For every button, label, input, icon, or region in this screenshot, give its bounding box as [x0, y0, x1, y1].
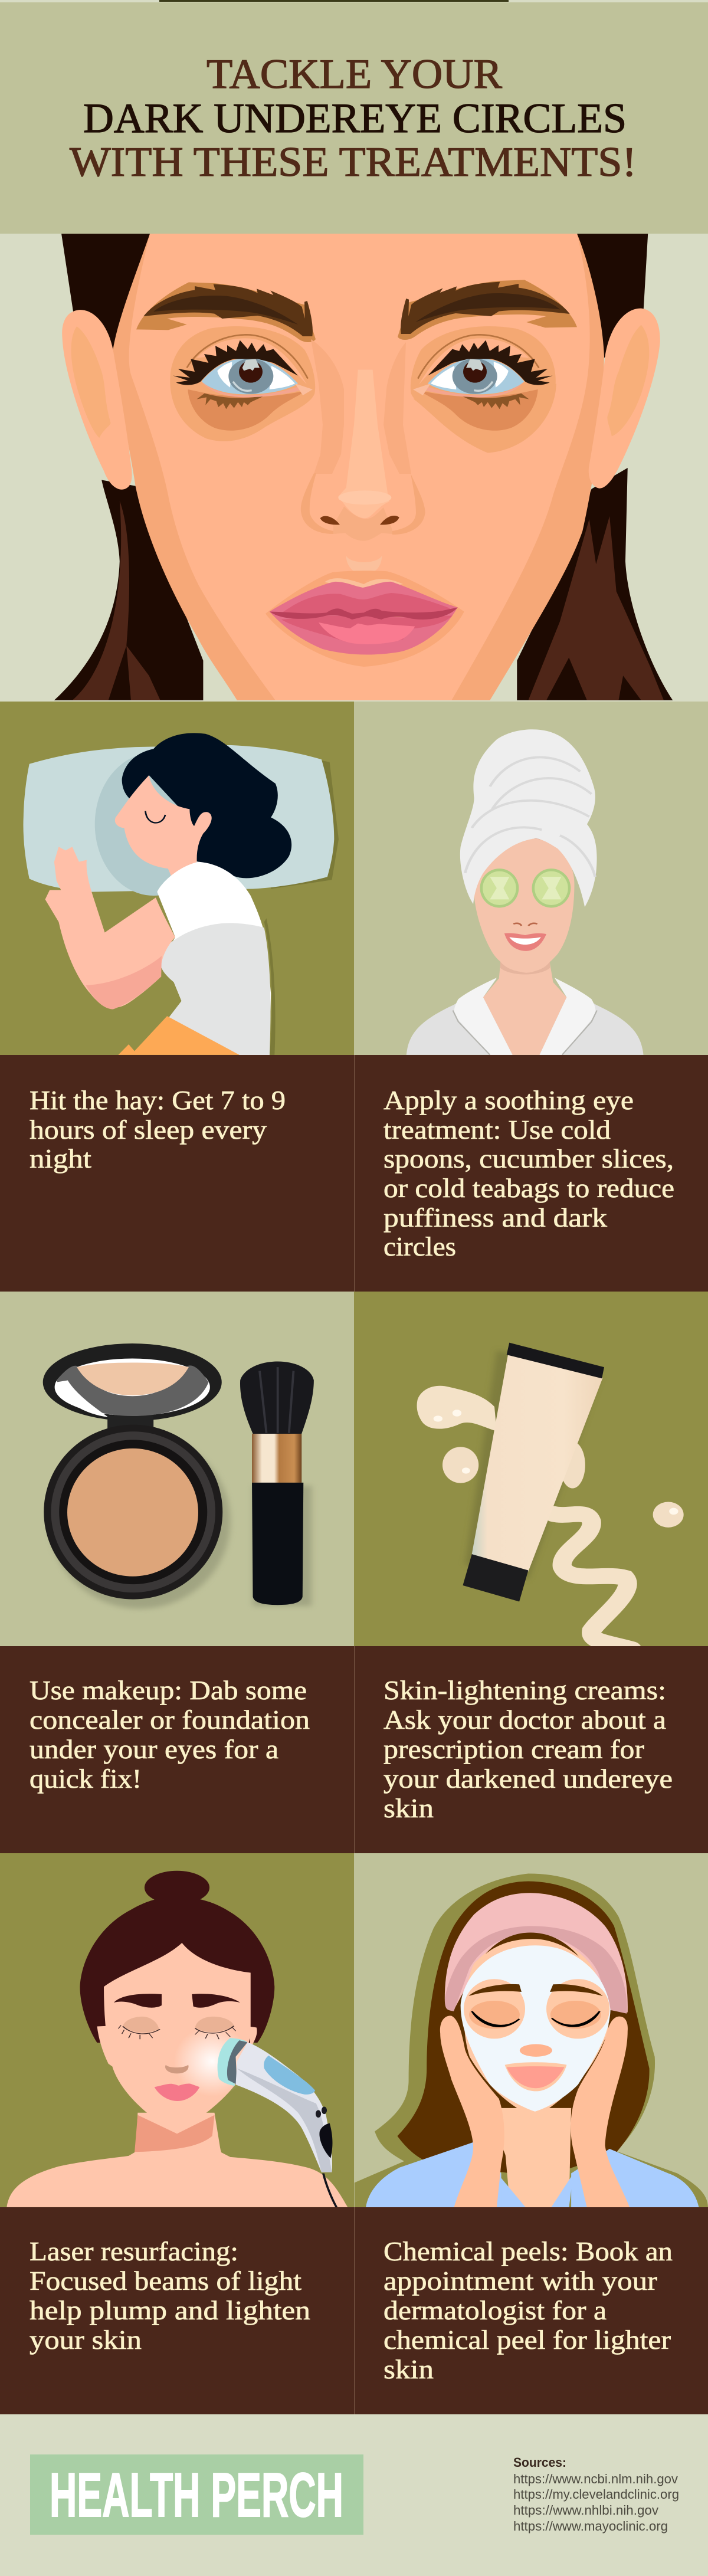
caption: hit the hay: hours of sleep every: [30, 1115, 267, 1145]
panel: header: [0, 0, 708, 234]
caption: laser resurfacing: Focused beams of light: [30, 2266, 301, 2296]
caption: laser resurfacing: [0, 2207, 354, 2414]
title line 1: TACKLE YOUR: [206, 51, 503, 97]
icon: left eye: [170, 326, 315, 441]
caption: hit the hay: night: [30, 1143, 91, 1174]
icon: left eyebrow: [136, 282, 316, 342]
sources list: https://www.ncbi.nlm.nih.gov: [513, 2472, 678, 2486]
title line 2: DARK UNDEREYE CIRCLES: [83, 96, 627, 142]
caption: skin-lightening creams: Skin-lightening creams:: [384, 1675, 666, 1705]
caption: laser resurfacing: your skin: [30, 2325, 142, 2355]
caption: use makeup: under your eyes for a: [30, 1734, 278, 1764]
caption: laser resurfacing: help plump and lighten: [30, 2295, 310, 2325]
illustration: hero face with dark circles: [54, 234, 673, 700]
caption: skin-lightening creams: prescription cream for: [384, 1734, 644, 1764]
icon: lips: [266, 571, 464, 667]
caption: skin-lightening creams: [354, 1646, 708, 1853]
icon: woman with towel and cucumber slices: [407, 729, 644, 1055]
icon: woman sleeping on pillow: [23, 733, 339, 1055]
icon: woman with laser device: [6, 1871, 348, 2208]
caption: chemical peels: Chemical peels: Book an: [384, 2236, 673, 2266]
panel: skin-lightening creams: [354, 1292, 708, 1649]
caption: use makeup: Use makeup: Dab some: [30, 1675, 307, 1705]
caption: chemical peels: skin: [384, 2354, 434, 2384]
caption: hit the hay: Hit the hay: Get 7 to 9: [30, 1085, 286, 1115]
icon: nose: [301, 339, 425, 574]
caption: soothing eye treatment: or cold teabags to reduce: [384, 1173, 674, 1203]
caption: hit the hay: [0, 1055, 354, 1292]
sources list: [513, 2455, 679, 2534]
caption: skin-lightening creams: Ask your doctor about a: [384, 1705, 666, 1735]
caption: soothing eye treatment: [354, 1055, 708, 1292]
logo: Health Perch: HEALTH PERCH: [50, 2460, 343, 2530]
panel: soothing eye treatment: [354, 702, 708, 1055]
caption: skin-lightening creams: skin: [384, 1793, 434, 1823]
panel: use makeup: [0, 1292, 354, 1646]
caption: laser resurfacing: Laser resurfacing:: [30, 2236, 238, 2266]
caption: use makeup: [0, 1646, 354, 1853]
panel: laser resurfacing: [0, 1853, 354, 2208]
sources list: Sources:: [513, 2455, 566, 2470]
caption: skin-lightening creams: your darkened undereye: [384, 1764, 673, 1794]
panel: chemical peels: [354, 1853, 708, 2208]
icon: woman with face mask: [355, 1873, 708, 2208]
icon: compact and makeup brush: [43, 1343, 314, 1609]
caption: chemical peels: dermatologist for a: [384, 2295, 607, 2325]
sources list: https://www.nhlbi.nih.gov: [513, 2503, 658, 2518]
caption: soothing eye treatment: Apply a soothing eye: [384, 1085, 634, 1115]
caption: chemical peels: chemical peel for lighter: [384, 2325, 671, 2355]
caption: use makeup: concealer or foundation: [30, 1705, 310, 1735]
icon: cream tube with spilled cream: [417, 1343, 684, 1649]
caption: soothing eye treatment: spoons, cucumber slices,: [384, 1143, 674, 1174]
icon: right eye: [411, 326, 556, 441]
panel: hit the hay: [0, 702, 354, 1055]
caption: chemical peels: appointment with your: [384, 2266, 657, 2296]
caption: soothing eye treatment: circles: [384, 1231, 456, 1261]
caption: use makeup: quick fix!: [30, 1764, 142, 1794]
title line 3: WITH THESE TREATMENTS!: [70, 139, 637, 185]
caption: soothing eye treatment: treatment: Use cold: [384, 1115, 611, 1145]
sources list: https://my.clevelandclinic.org: [513, 2487, 679, 2502]
caption: chemical peels: [354, 2207, 708, 2414]
logo: Health Perch: [30, 2454, 363, 2535]
icon: right eyebrow: [398, 280, 577, 340]
caption: soothing eye treatment: puffiness and dark: [384, 1202, 607, 1233]
sources list: https://www.mayoclinic.org: [513, 2519, 668, 2534]
